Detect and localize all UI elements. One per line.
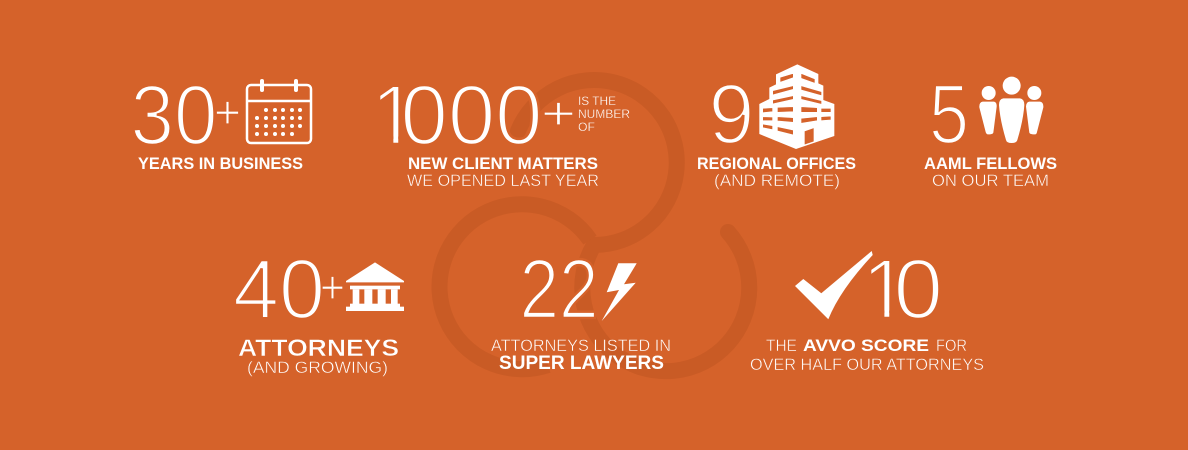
icon: calendar [247,81,311,143]
label: super lawyers: SUPER LAWYERS [499,353,664,374]
stat: 1000+ new client matters [371,68,630,190]
small text: is the number of: NUMBER [578,107,630,121]
number 10: 0 [894,242,943,336]
plus sign: + [541,87,576,139]
number 40: 40 [233,242,325,336]
number 1000: 1 [371,68,418,162]
label: new client matters: NEW CLIENT MATTERS [408,154,598,173]
icon: lightning bolt [602,263,637,321]
stat: 30+ years in business [130,68,311,173]
label: the avvo score for: AVVO SCORE [803,336,929,355]
number 10: 1 [862,242,909,336]
label: and growing: (AND GROWING) [247,358,388,377]
decorative swirl rings [439,80,749,371]
icon: three people [979,77,1043,143]
label: and remote: (AND REMOTE) [714,171,840,190]
label: we opened last year: WE OPENED LAST YEAR [407,171,599,190]
icon: courthouse [346,262,404,311]
label: regional offices: REGIONAL OFFICES [697,154,856,173]
label: years in business: YEARS IN BUSINESS [138,154,303,173]
plus sign: + [320,261,345,313]
label: the avvo score for: FOR [936,336,967,355]
stat: 5 AAML fellows [924,67,1057,190]
label: the avvo score for [766,336,967,355]
plus sign: + [214,86,241,138]
icon: office building [759,64,834,149]
stat: avvo score 10 [750,242,984,374]
stat: 9 regional offices [697,64,856,190]
label: attorneys: ATTORNEYS [238,335,399,362]
stat: 22 super lawyers [491,242,671,374]
label: the avvo score for: THE [766,336,797,355]
number 22: 22 [520,242,598,336]
number 10 [862,242,943,336]
label: over half our attorneys: OVER HALF OUR ATTORNEYS [750,355,984,374]
stat: 40+ attorneys [233,242,404,377]
number 5: 5 [929,67,969,161]
number 9: 9 [708,67,754,161]
small text: is the number of [578,94,630,134]
number 1000: 000 [400,68,542,162]
icon: check mark [795,251,873,319]
small text: is the number of: IS THE [578,94,616,108]
number 30: 30 [130,68,218,162]
label: attorneys listed in: ATTORNEYS LISTED IN [491,336,671,355]
label: on our team: ON OUR TEAM [932,171,1049,190]
small text: is the number of: OF [578,120,595,134]
label: AAML fellows: AAML FELLOWS [924,154,1057,173]
